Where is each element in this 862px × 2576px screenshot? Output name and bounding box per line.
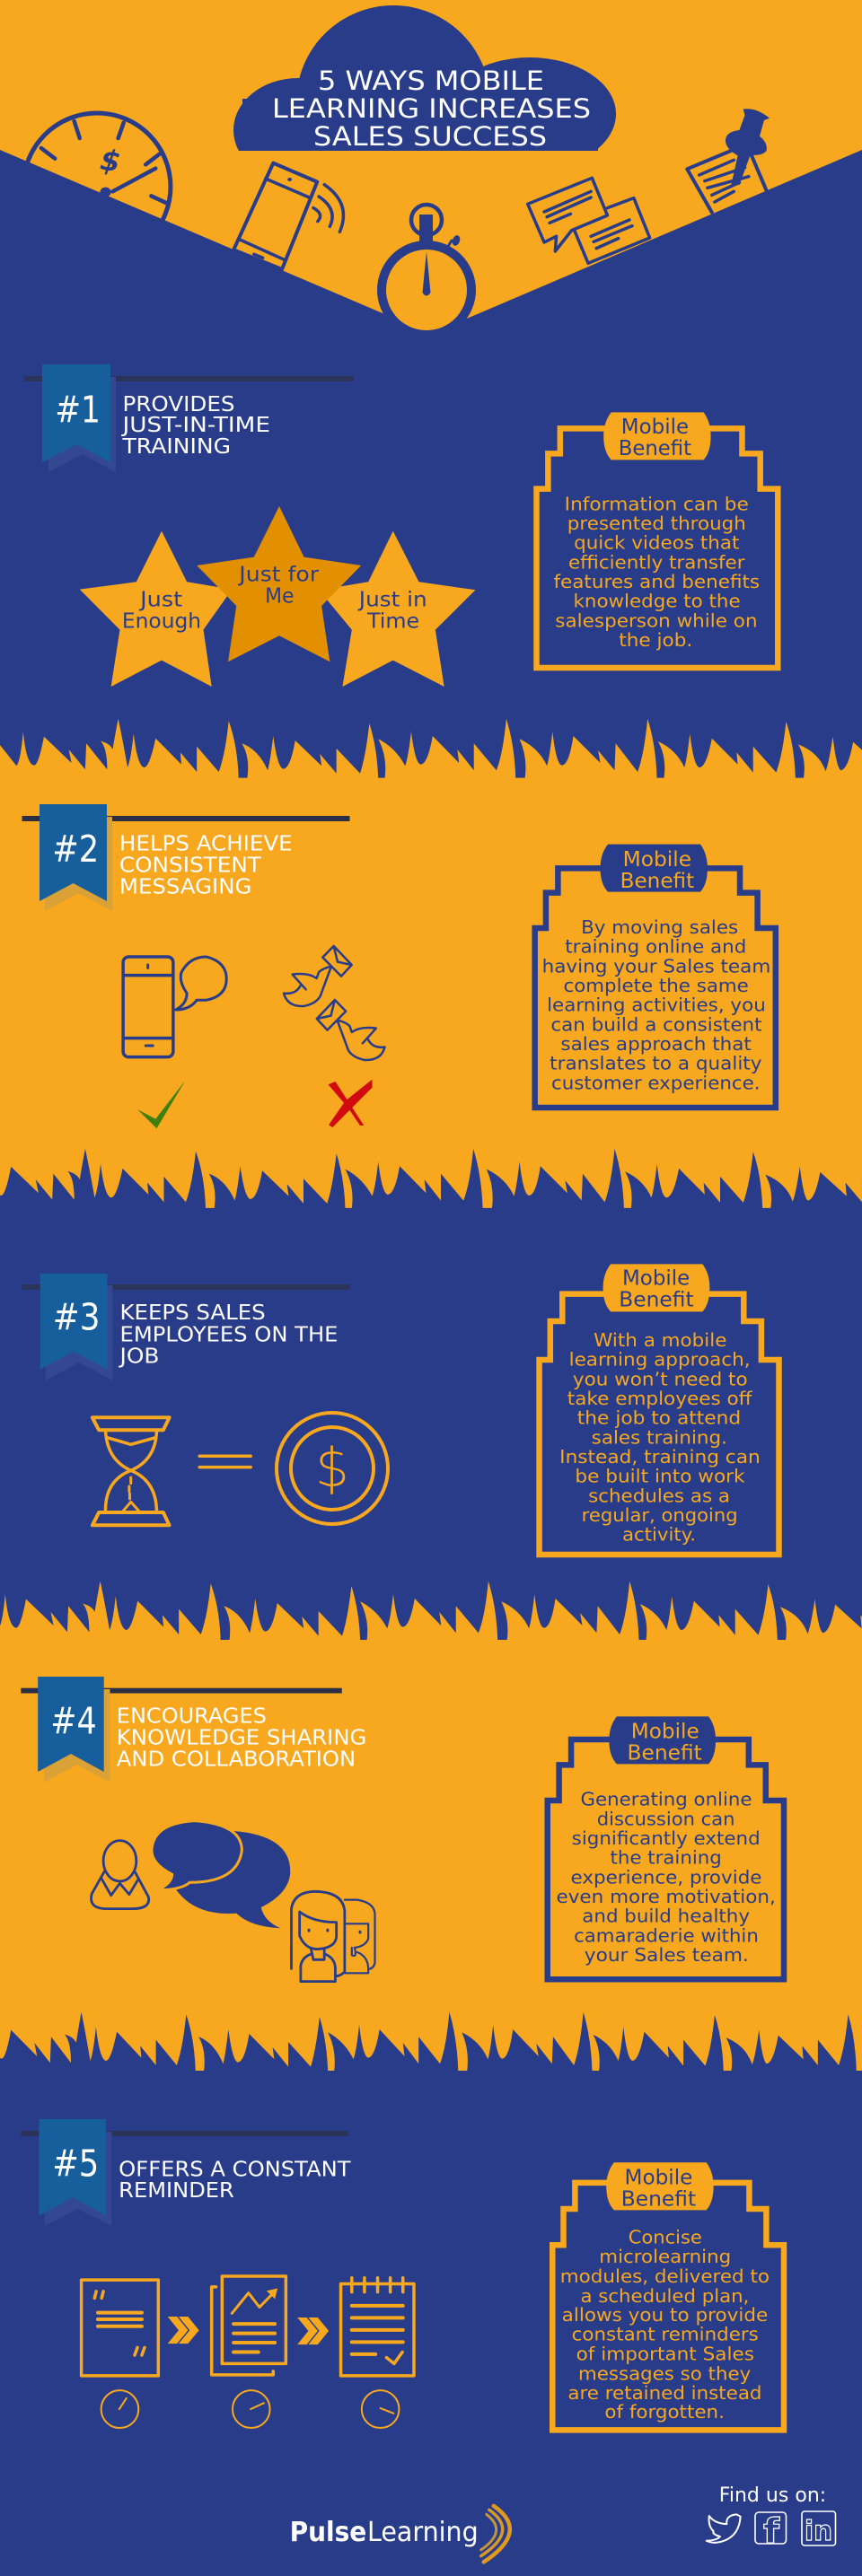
- panel: mobile benefit 1: knowledge to the: [573, 591, 741, 612]
- panel: mobile benefit 3: Instead, training can: [559, 1446, 761, 1468]
- section 5 heading: OFFERS A CONSTANT: [119, 2156, 351, 2181]
- section 4 orange band: [0, 1640, 862, 2072]
- panel: mobile benefit 1: Mobile: [621, 416, 689, 439]
- panel: mobile benefit 2: By moving sales: [581, 916, 738, 938]
- panel: mobile benefit 5: Concise: [629, 2227, 702, 2248]
- stars: just enough, just for me, just in time: Time: [366, 609, 419, 633]
- section 2 heading: MESSAGING: [119, 874, 251, 899]
- icon: smartphone with signal: [233, 163, 343, 269]
- panel: mobile benefit 1: quick videos that: [574, 532, 739, 554]
- panel: mobile benefit 2: translates to a quality: [550, 1053, 761, 1074]
- panel: mobile benefit 1: features and benefits: [553, 571, 760, 592]
- panel: mobile benefit 2: customer experience.: [551, 1072, 761, 1093]
- icon: envelope birds with cross: [284, 946, 385, 1127]
- section 2 heading: HELPS ACHIEVE: [119, 831, 293, 856]
- section 5 blue band: [0, 2071, 862, 2576]
- section 4 heading: #4: [50, 1700, 97, 1743]
- blue grass divider 2: [0, 1149, 862, 1220]
- stars: just enough, just for me, just in time: Me: [265, 585, 295, 609]
- panel: mobile benefit 4: discussion can: [597, 1808, 734, 1829]
- orange grass divider 1: [0, 719, 862, 790]
- icon: chat bubbles: [528, 178, 650, 263]
- panel: mobile benefit 3: be built into work: [575, 1466, 745, 1487]
- panel: mobile benefit 5: of forgotten.: [604, 2401, 725, 2423]
- title cloud: [233, 5, 616, 151]
- panel: mobile benefit 1: presented through: [567, 513, 746, 534]
- panel: mobile benefit 4: significantly extend: [572, 1827, 761, 1849]
- section 1 heading: [24, 364, 354, 472]
- panel: mobile benefit 5: a scheduled plan,: [580, 2285, 749, 2307]
- icon: phone with speech bubble and check: [123, 957, 226, 1128]
- background: orange header: [0, 0, 862, 359]
- icon: facebook: f: [763, 2511, 779, 2551]
- title: SALES SUCCESS: [313, 121, 547, 152]
- section 1 heading: JUST-IN-TIME: [120, 412, 270, 437]
- panel: mobile benefit 5: Mobile: [625, 2167, 692, 2190]
- panel: mobile benefit 4: your Sales team.: [585, 1944, 749, 1966]
- section 2 heading: CONSISTENT: [119, 853, 262, 878]
- panel: mobile benefit 4: camaraderie within: [574, 1924, 759, 1946]
- background: blue valley for section 1: [0, 150, 862, 790]
- panel: mobile benefit 5: are retained instead: [567, 2382, 761, 2404]
- stars: just enough, just for me, just in time: Enough: [122, 609, 201, 633]
- title: 5 WAYS MOBILE: [318, 66, 544, 96]
- panel: mobile benefit 1: Benefit: [619, 437, 691, 460]
- section 3 blue band: [0, 1208, 862, 1641]
- section 3 heading: EMPLOYEES ON THE: [120, 1321, 338, 1346]
- section 1 heading: PROVIDES: [122, 391, 235, 416]
- panel: mobile benefit 3: activity.: [622, 1524, 696, 1546]
- panel: mobile benefit 4: [548, 1716, 784, 1979]
- panel: mobile benefit 4: the training: [611, 1847, 722, 1869]
- section 5 heading: [21, 2119, 351, 2226]
- logo: PulseLearning: Pulse: [290, 2517, 366, 2548]
- section 1 heading: TRAINING: [121, 434, 231, 459]
- section 2 orange band: [0, 778, 862, 1209]
- panel: mobile benefit 1: the job.: [619, 629, 692, 651]
- icon: pinned note: [687, 109, 770, 213]
- stars: just enough, just for me, just in time: Just in: [357, 589, 427, 612]
- panel: mobile benefit 2: can build a consistent: [550, 1013, 761, 1035]
- panel: mobile benefit 2: complete the same: [564, 975, 749, 996]
- stars: just enough, just for me, just in time: [80, 506, 476, 687]
- icon: money dial: [23, 113, 171, 260]
- icon: stopwatch: [377, 205, 476, 339]
- panel: mobile benefit 5: of important Sales: [576, 2344, 754, 2365]
- section 4 heading: KNOWLEDGE SHARING: [117, 1724, 366, 1749]
- stars: just enough, just for me, just in time: Just: [138, 589, 182, 612]
- icon: hourglass equals money: [92, 1413, 388, 1525]
- section 1 heading: #1: [55, 389, 101, 432]
- panel: mobile benefit 5: [552, 2162, 784, 2430]
- panel: mobile benefit 1: efficiently transfer: [568, 551, 745, 573]
- section 3 heading: KEEPS SALES: [120, 1300, 266, 1325]
- find us on label: Find us on:: [719, 2484, 826, 2507]
- section 5 heading: REMINDER: [119, 2177, 234, 2203]
- panel: mobile benefit 3: [540, 1264, 778, 1555]
- panel: mobile benefit 3: learning approach,: [569, 1349, 751, 1371]
- section 4 heading: ENCOURAGES: [117, 1703, 267, 1728]
- panel: mobile benefit 4: and build healthy: [582, 1906, 750, 1927]
- section 4 heading: AND COLLABORATION: [117, 1746, 356, 1771]
- icon: dollar sign on dial: $: [98, 143, 123, 180]
- panel: mobile benefit 3: With a mobile: [594, 1329, 726, 1351]
- panel: mobile benefit 3: you won’t need to: [573, 1368, 748, 1389]
- panel: mobile benefit 2: having your Sales team: [542, 955, 770, 977]
- panel: mobile benefit 3: schedules as a: [588, 1485, 730, 1506]
- blue grass divider 4: [0, 2012, 862, 2083]
- title: LEARNING INCREASES: [272, 93, 591, 124]
- icon: facebook: [755, 2511, 787, 2551]
- logo: PulseLearning: [290, 2506, 510, 2562]
- icon: twitter: [707, 2514, 741, 2543]
- panel: mobile benefit 2: sales approach that: [560, 1033, 752, 1055]
- panel: mobile benefit 2: training online and: [565, 936, 746, 958]
- panel: mobile benefit 2: learning activities, you: [547, 994, 766, 1016]
- icon: document sequence with clocks: [82, 2276, 414, 2428]
- section 3 heading: [22, 1274, 350, 1380]
- panel: mobile benefit 3: sales training.: [592, 1426, 727, 1448]
- panel: mobile benefit 1: [537, 412, 778, 668]
- section 3 heading: JOB: [118, 1343, 160, 1368]
- panel: mobile benefit 2: Mobile: [623, 848, 691, 872]
- panel: mobile benefit 5: modules, delivered to: [560, 2265, 770, 2287]
- panel: mobile benefit 5: messages so they: [578, 2363, 751, 2385]
- panel: mobile benefit 1: Information can be: [565, 493, 749, 514]
- section 4 heading: [21, 1677, 366, 1783]
- orange grass divider 3: [0, 1582, 862, 1652]
- panel: mobile benefit 2: Benefit: [620, 870, 694, 893]
- panel: mobile benefit 1: salesperson while on: [555, 609, 758, 631]
- section 5 heading: #5: [52, 2142, 99, 2185]
- panel: mobile benefit 3: take employees off: [567, 1388, 752, 1409]
- icons clipped by the blue valley: [23, 109, 770, 269]
- icon: people conversation: [92, 1821, 375, 1982]
- panel: mobile benefit 3: Mobile: [622, 1267, 690, 1291]
- section 2 heading: [22, 804, 350, 911]
- panel: mobile benefit 4: experience, provide: [571, 1866, 761, 1888]
- logo: PulseLearning: Learning: [367, 2517, 479, 2548]
- panel: mobile benefit 4: Generating online: [580, 1789, 752, 1810]
- section 2 heading: #2: [52, 828, 99, 871]
- panel: mobile benefit 5: Benefit: [621, 2188, 696, 2212]
- panel: mobile benefit 5: allows you to provide: [562, 2304, 768, 2326]
- title: [272, 66, 591, 152]
- panel: mobile benefit 4: even more motivation,: [557, 1886, 776, 1907]
- panel: mobile benefit 4: Benefit: [627, 1742, 702, 1766]
- icon: linkedin: in: [805, 2516, 832, 2547]
- icon: hourglass equals money: $: [315, 1437, 349, 1500]
- stars: just enough, just for me, just in time: Just for: [237, 564, 320, 587]
- panel: mobile benefit 5: microlearning: [599, 2246, 731, 2267]
- panel: mobile benefit 3: Benefit: [619, 1289, 694, 1312]
- panel: mobile benefit 2: [535, 845, 776, 1108]
- panel: mobile benefit 3: regular, ongoing: [582, 1504, 738, 1526]
- panel: mobile benefit 3: the job to attend: [577, 1407, 741, 1429]
- panel: mobile benefit 5: constant reminders: [572, 2324, 759, 2345]
- panel: mobile benefit 4: Mobile: [631, 1721, 699, 1744]
- section 3 heading: #3: [53, 1296, 100, 1339]
